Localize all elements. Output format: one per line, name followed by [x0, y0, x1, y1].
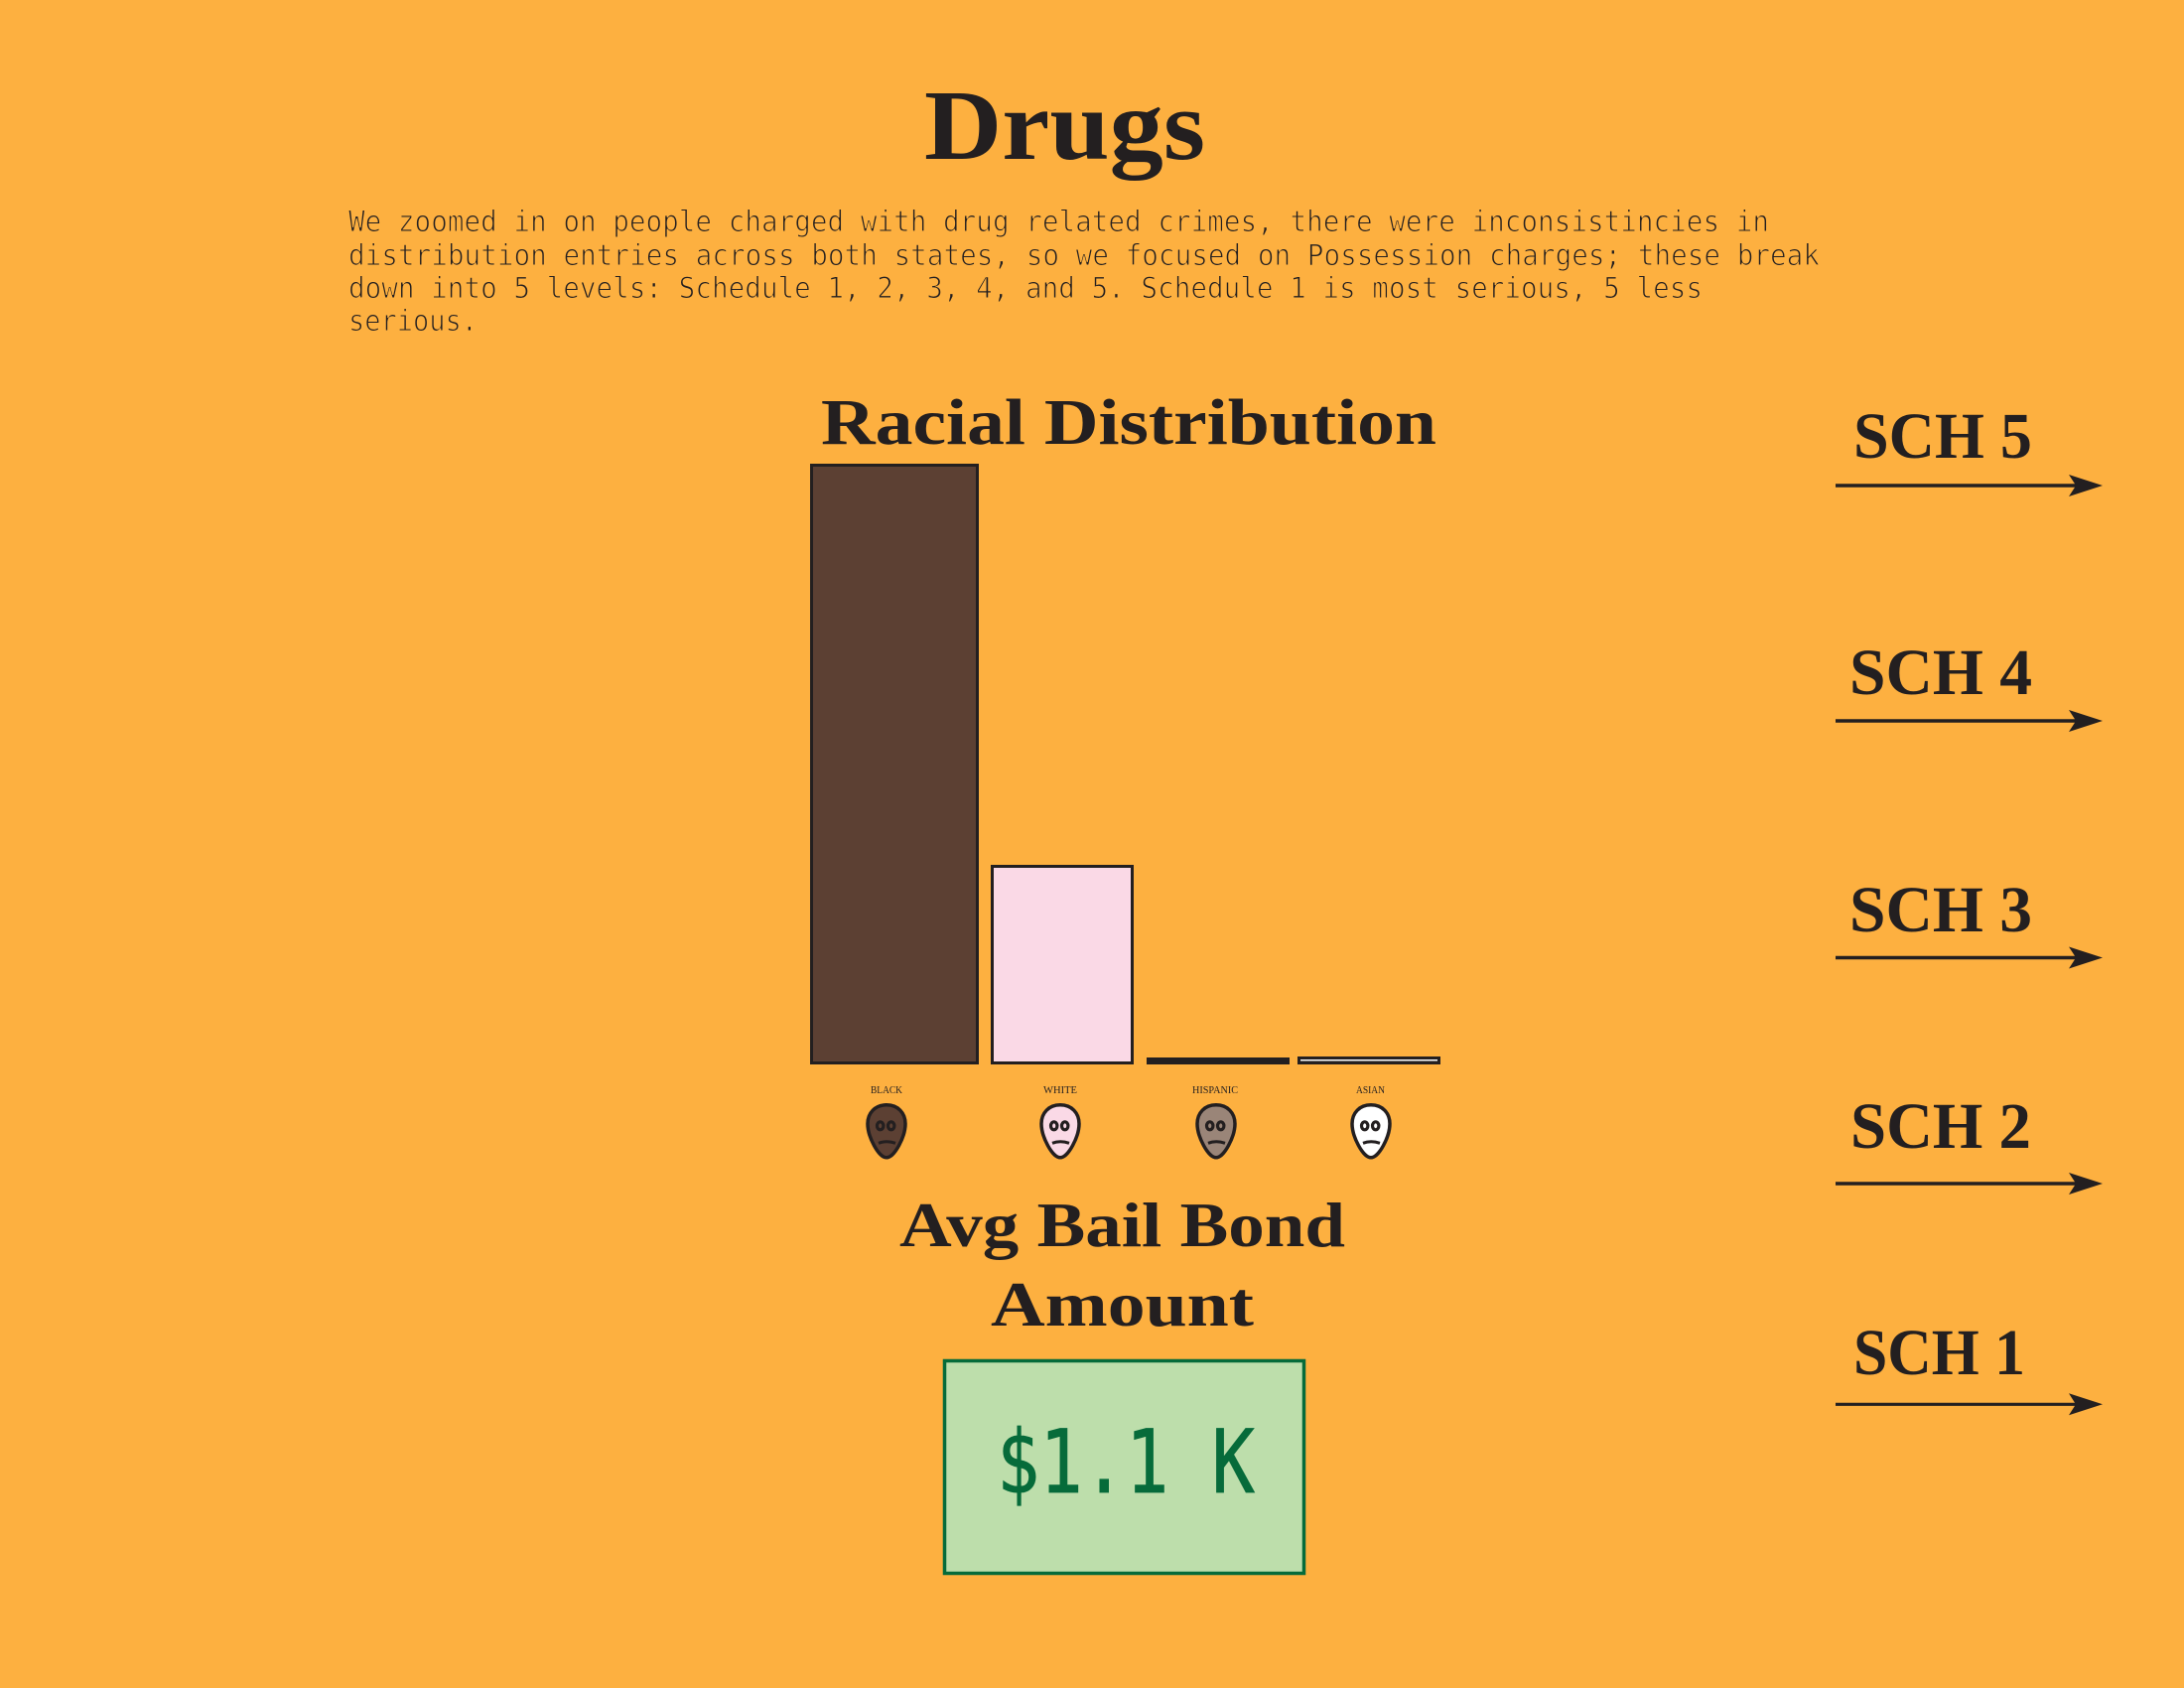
icon: hispanic face — [1197, 1105, 1235, 1158]
heading: racial distribution: Racial Distribution — [821, 386, 1436, 459]
arrow: schedule 5 — [1836, 475, 2103, 496]
bar chart: racial distribution — [812, 465, 1440, 1064]
bar: white — [993, 866, 1132, 1062]
bar: asian — [1297, 1056, 1440, 1064]
arrow: schedule 1 — [1836, 1393, 2103, 1415]
heading: avg bail bond amount: Amount — [991, 1269, 1255, 1339]
title: Drugs — [924, 70, 1205, 181]
arrow: schedule 3 — [1836, 947, 2103, 969]
heading: avg bail bond amount — [899, 1190, 1345, 1339]
bar: black — [812, 465, 977, 1062]
schedule 4 label: SCH 4 — [1849, 636, 2032, 709]
icon: asian face — [1352, 1105, 1390, 1158]
callout: bail amount — [945, 1360, 1304, 1573]
intro text block: serious. — [348, 304, 478, 338]
intro text block: We zoomed in on people charged with drug related crimes, there were inconsistincies in — [348, 205, 1769, 238]
callout: bail amount: $1.1 K — [997, 1411, 1255, 1513]
schedule 2 label: SCH 2 — [1850, 1090, 2031, 1163]
label: hispanic: HISPANIC — [1192, 1084, 1238, 1096]
intro text block: distribution entries across both states, so we focused on Possession charges; these break — [348, 238, 1821, 272]
heading: avg bail bond amount: Avg Bail Bond — [899, 1190, 1345, 1260]
icon: white face — [1041, 1105, 1079, 1158]
schedule 5 label: SCH 5 — [1853, 400, 2032, 473]
label: white: WHITE — [1043, 1084, 1077, 1096]
icon: black face — [868, 1105, 905, 1158]
label: asian: ASIAN — [1356, 1084, 1385, 1096]
intro text block: down into 5 levels: Schedule 1, 2, 3, 4, and 5. Schedule 1 is most serious, 5 less — [348, 271, 1703, 305]
bar: hispanic — [1147, 1057, 1290, 1064]
schedule 3 label: SCH 3 — [1849, 874, 2032, 946]
intro text block — [348, 205, 1821, 338]
arrow: schedule 2 — [1836, 1173, 2103, 1195]
arrow: schedule 4 — [1836, 710, 2103, 732]
schedule 1 label: SCH 1 — [1853, 1317, 2025, 1389]
label: black: BLACK — [871, 1084, 902, 1096]
